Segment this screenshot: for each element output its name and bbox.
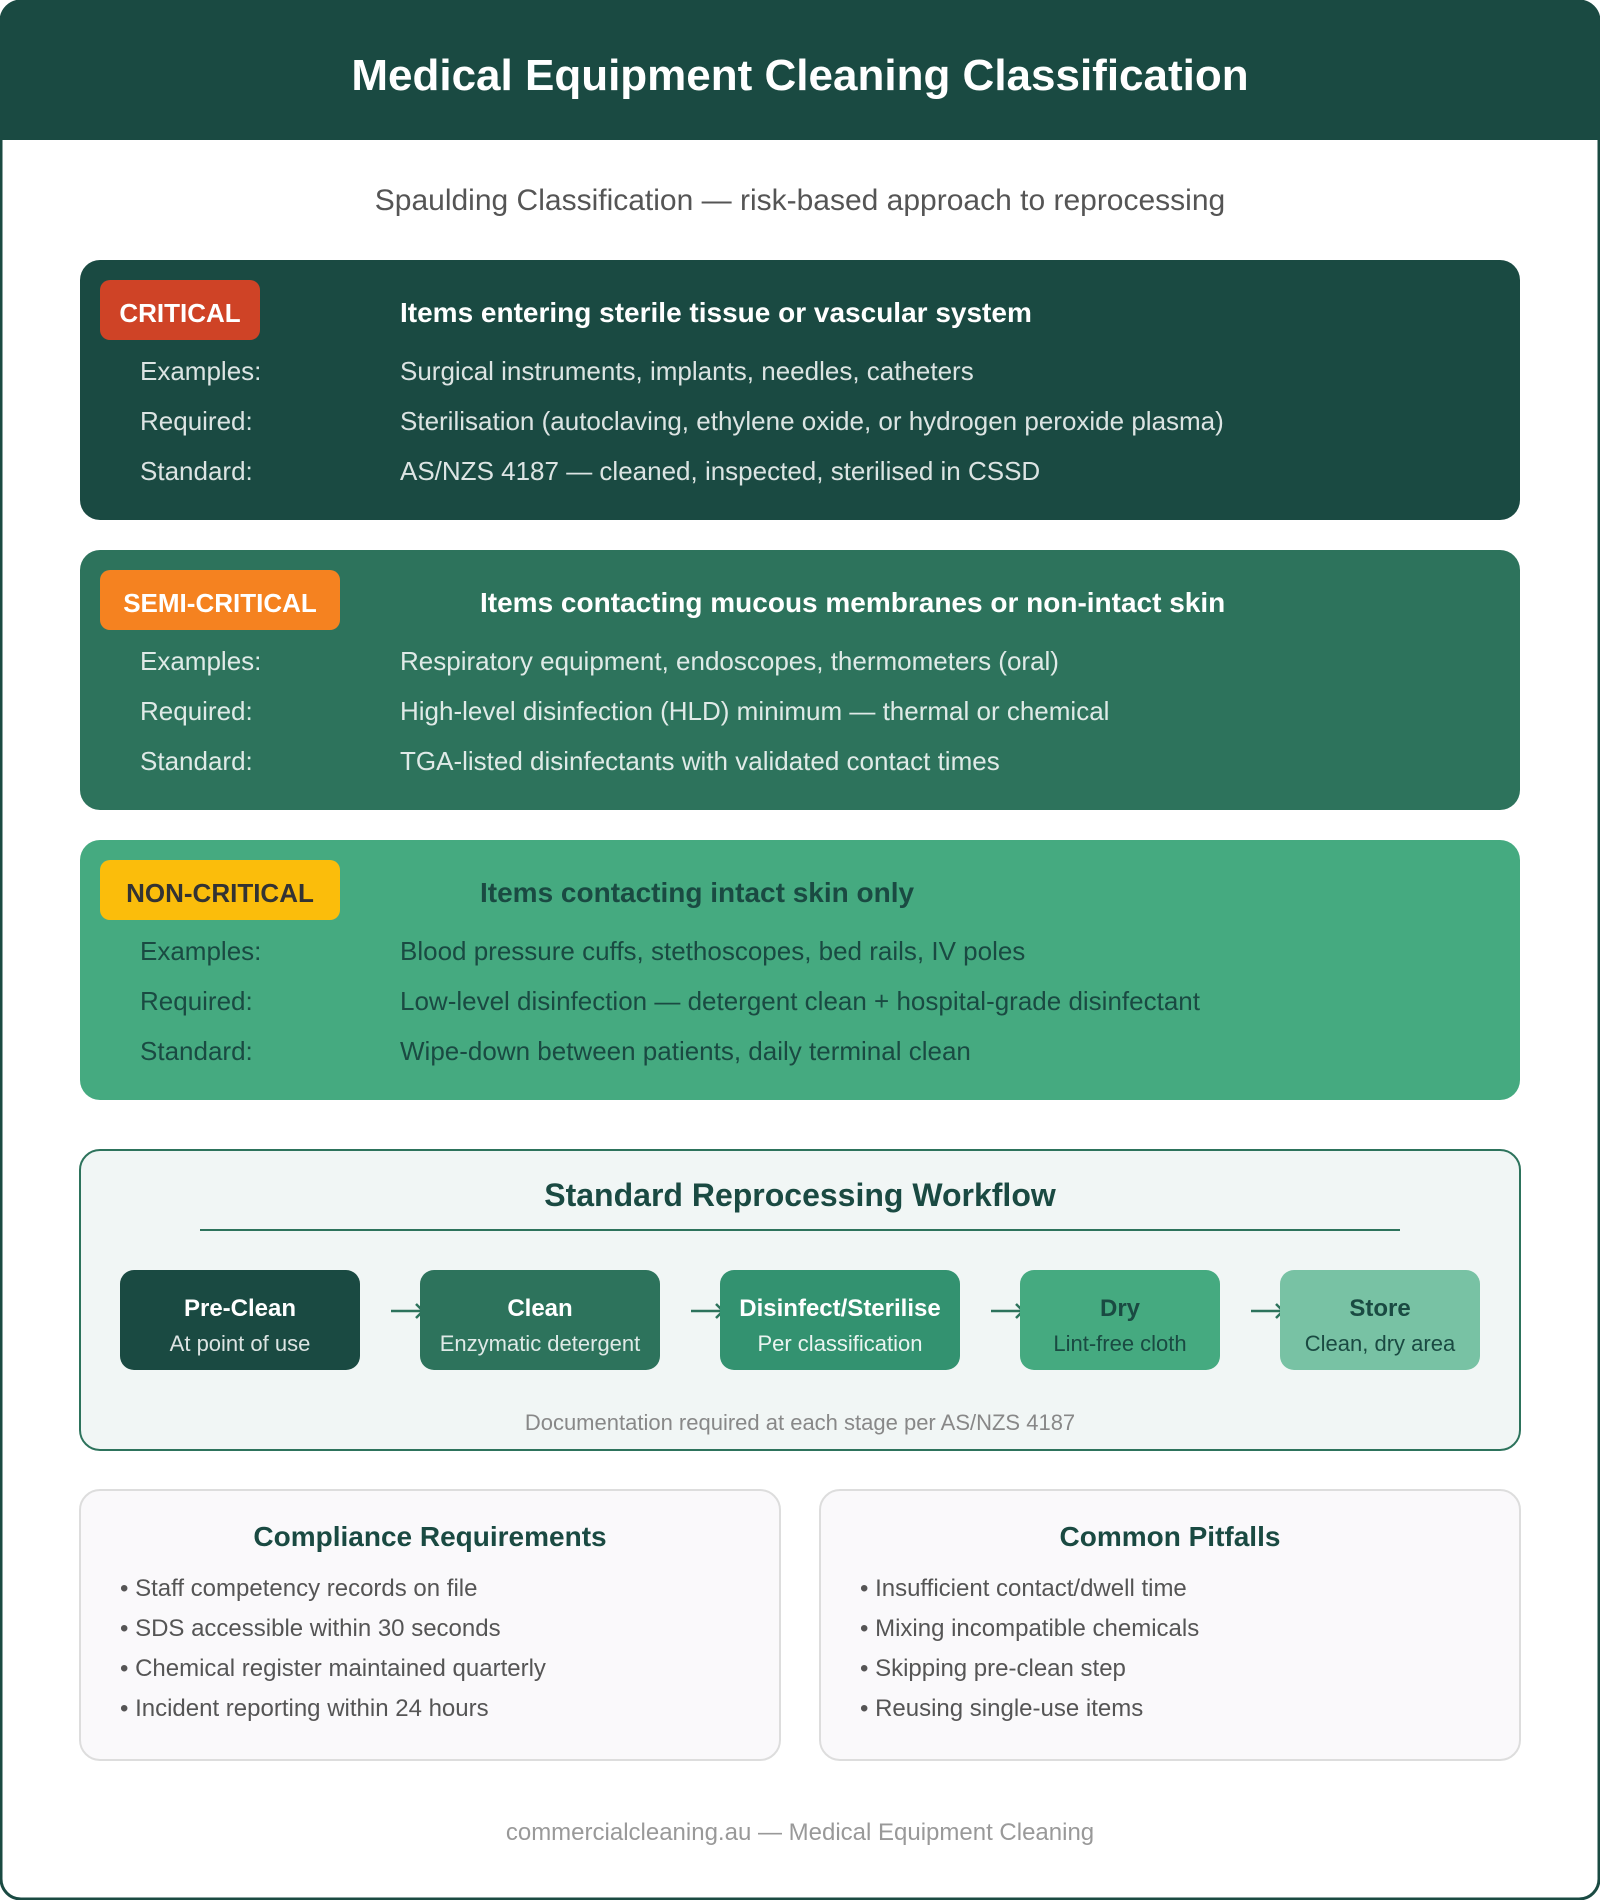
non-critical details [140,936,1201,1066]
critical details: Examples: [140,356,261,386]
header band [0,0,1600,140]
workflow heading: Standard Reprocessing Workflow [544,1177,1056,1213]
panel: non-critical [80,840,1520,1100]
badge: semi-critical [100,570,340,630]
critical details: Standard: [140,456,253,486]
semi-critical details [140,646,1109,776]
compliance list [120,1575,546,1722]
footer: commercialcleaning.au — Medical Equipment Cleaning [506,1819,1094,1846]
pitfalls list: • Reusing single-use items [860,1695,1143,1722]
badge: semi-critical: SEMI-CRITICAL [123,588,317,618]
step: dry: Dry [1100,1295,1141,1322]
semi-critical details: Required: [140,696,253,726]
panel: critical [80,260,1520,520]
pitfalls heading: Common Pitfalls [1060,1521,1280,1552]
non-critical details: Wipe-down between patients, daily terminal clean [400,1036,971,1066]
badge: non-critical: NON-CRITICAL [126,878,314,908]
step: pre-clean: At point of use [170,1331,310,1356]
arrow: clean to disinfect [691,1304,724,1318]
step: pre-clean: Pre-Clean [184,1295,296,1322]
badge: critical [100,280,260,340]
pitfalls list: • Insufficient contact/dwell time [860,1575,1187,1602]
semi-critical heading: Items contacting mucous membranes or non-intact skin [480,587,1225,618]
step: clean: Clean [507,1295,573,1322]
step: store: Store [1349,1295,1411,1322]
critical details: Required: [140,406,253,436]
pitfalls list: • Skipping pre-clean step [860,1655,1126,1682]
semi-critical details: Respiratory equipment, endoscopes, thermometers (oral) [400,646,1059,676]
arrow: pre-clean to clean [391,1304,424,1318]
step: pre-clean [120,1270,360,1370]
panel: common pitfalls [820,1490,1520,1760]
step: dry: Lint-free cloth [1053,1331,1187,1356]
step: dry [1020,1270,1220,1370]
pitfalls list: • Mixing incompatible chemicals [860,1615,1199,1642]
semi-critical details: Standard: [140,746,253,776]
workflow note: Documentation required at each stage per AS/NZS 4187 [525,1410,1075,1435]
badge: non-critical [100,860,340,920]
compliance list: • Chemical register maintained quarterly [120,1655,546,1682]
panel: semi-critical [80,550,1520,810]
arrow: dry to store [1251,1304,1284,1318]
critical heading: Items entering sterile tissue or vascular system [400,297,1032,328]
critical details [140,356,1224,486]
critical details: Surgical instruments, implants, needles, catheters [400,356,974,386]
step: disinfect/sterilise: Per classification [757,1331,923,1356]
critical details: Sterilisation (autoclaving, ethylene oxide, or hydrogen peroxide plasma) [400,406,1224,436]
title: Medical Equipment Cleaning Classification [351,51,1249,100]
non-critical heading: Items contacting intact skin only [480,877,915,908]
badge: critical: CRITICAL [119,298,241,328]
semi-critical details: TGA-listed disinfectants with validated contact times [400,746,1000,776]
non-critical details: Low-level disinfection — detergent clean + hospital-grade disinfectant [400,986,1201,1016]
step: clean: Enzymatic detergent [440,1331,640,1356]
non-critical details: Blood pressure cuffs, stethoscopes, bed rails, IV poles [400,936,1025,966]
compliance list: • Incident reporting within 24 hours [120,1695,489,1722]
pitfalls list [860,1575,1199,1722]
step: store [1280,1270,1480,1370]
compliance list: • SDS accessible within 30 seconds [120,1615,501,1642]
semi-critical details: Examples: [140,646,261,676]
panel: reprocessing workflow [80,1150,1520,1450]
non-critical details: Examples: [140,936,261,966]
non-critical details: Standard: [140,1036,253,1066]
non-critical details: Required: [140,986,253,1016]
compliance heading: Compliance Requirements [253,1521,607,1552]
critical details: AS/NZS 4187 — cleaned, inspected, sterilised in CSSD [400,456,1040,486]
step: store: Clean, dry area [1305,1331,1456,1356]
panel: compliance requirements [80,1490,780,1760]
semi-critical details: High-level disinfection (HLD) minimum — thermal or chemical [400,696,1109,726]
subtitle: Spaulding Classification — risk-based approach to reprocessing [375,184,1225,217]
compliance list: • Staff competency records on file [120,1575,477,1602]
arrow: disinfect to dry [991,1304,1024,1318]
step: disinfect/sterilise [720,1270,960,1370]
step: clean [420,1270,660,1370]
step: disinfect/sterilise: Disinfect/Sterilise [739,1295,941,1322]
